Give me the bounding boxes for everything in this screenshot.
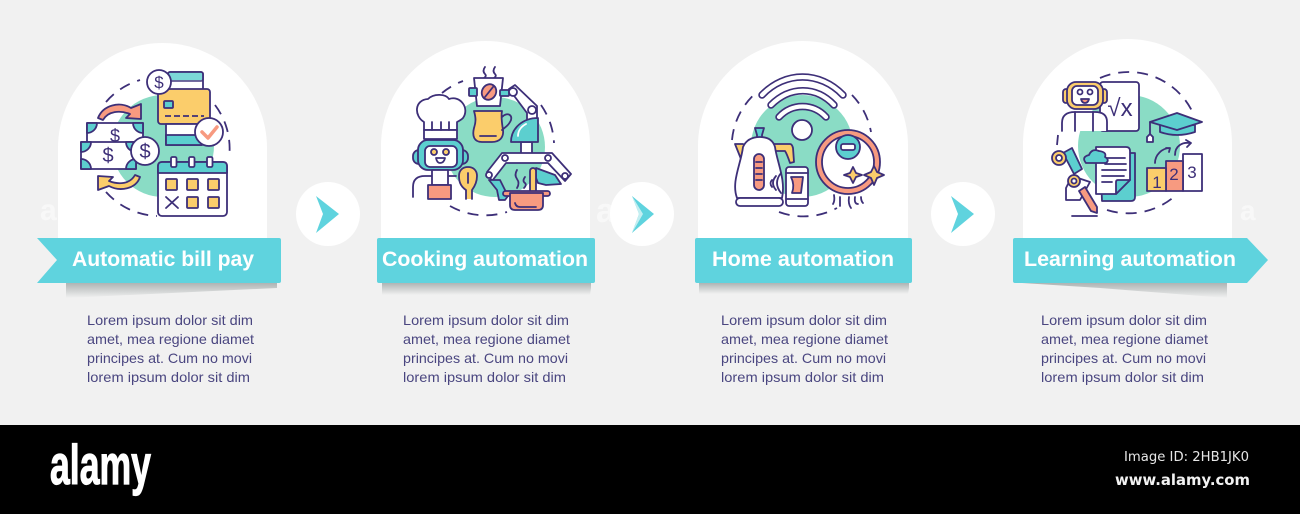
ribbon — [695, 238, 912, 283]
arrow: step 2 to 3 — [610, 182, 674, 246]
body text: amet, mea regione diamet — [403, 331, 570, 347]
card background arch — [381, 41, 590, 240]
body text: amet, mea regione diamet — [1041, 331, 1208, 347]
image id: Image ID: 2HB1JK0 — [1124, 449, 1249, 465]
ribbon — [377, 238, 595, 283]
footer bar — [0, 425, 1300, 514]
panel: cooking automation — [377, 41, 595, 385]
body text: Lorem ipsum dolor sit dim — [87, 312, 253, 328]
body text — [1041, 312, 1208, 385]
icon: bills, card and calendar: $ — [102, 145, 114, 167]
body text: amet, mea regione diamet — [87, 331, 254, 347]
body text: lorem ipsum dolor sit dim — [403, 369, 566, 385]
heading: Automatic bill pay — [72, 248, 254, 271]
body text: Lorem ipsum dolor sit dim — [1041, 312, 1207, 328]
body text: Lorem ipsum dolor sit dim — [721, 312, 887, 328]
website: www.alamy.com — [1115, 471, 1250, 489]
body text: principes at. Cum no movi — [1041, 350, 1206, 366]
icon: wifi, kettle, phone and robot vacuum — [732, 77, 884, 216]
icon: robot teacher, documents, cap and podium: √x — [1107, 95, 1133, 122]
body text: lorem ipsum dolor sit dim — [721, 369, 884, 385]
card background arch — [58, 43, 267, 240]
body text — [721, 312, 888, 385]
body text: principes at. Cum no movi — [403, 350, 568, 366]
body text: principes at. Cum no movi — [721, 350, 886, 366]
body text — [403, 312, 570, 385]
body text: amet, mea regione diamet — [721, 331, 888, 347]
alamy logo: alamy — [50, 433, 151, 496]
icon: bills, card and calendar: $ — [110, 126, 120, 146]
ribbon shadow — [699, 283, 909, 294]
icon: robot teacher, documents, cap and podium — [1052, 72, 1202, 216]
panel: home automation — [695, 41, 912, 385]
body text: lorem ipsum dolor sit dim — [87, 369, 250, 385]
body text — [87, 312, 254, 385]
heading: Home automation — [712, 248, 894, 271]
ribbon shadow — [1022, 283, 1227, 298]
watermark fragment right: a — [1240, 195, 1256, 226]
icon: robot teacher, documents, cap and podium: 3 — [1187, 163, 1197, 182]
watermark fragment middle: a — [596, 192, 616, 230]
heading: Learning automation — [1024, 248, 1236, 271]
ribbon with notched left end — [37, 238, 281, 283]
body text: Lorem ipsum dolor sit dim — [403, 312, 569, 328]
heading: Cooking automation — [382, 248, 588, 271]
watermark fragment left: a — [40, 194, 57, 227]
ribbon shadow — [382, 283, 591, 295]
body text: principes at. Cum no movi — [87, 350, 252, 366]
icon: bills, card and calendar: $ — [154, 73, 164, 92]
ribbon shadow — [66, 283, 277, 298]
ribbon with arrow right end — [1013, 238, 1268, 283]
icon: robot teacher, documents, cap and podium: 1 — [1152, 173, 1162, 192]
icon: bills, card and calendar: $ — [139, 141, 151, 163]
body text: lorem ipsum dolor sit dim — [1041, 369, 1204, 385]
panel: automatic bill pay — [37, 43, 281, 385]
icon: bills, card and calendar — [81, 70, 230, 216]
panel: learning automation — [1013, 39, 1268, 385]
arrow: step 3 to 4 — [931, 182, 995, 246]
card background arch — [1023, 39, 1232, 240]
icon: robot chef and robotic arms — [413, 67, 571, 215]
arrow: step 1 to 2 — [296, 182, 360, 246]
icon: robot teacher, documents, cap and podium: 2 — [1169, 165, 1179, 184]
card background arch — [698, 41, 908, 240]
